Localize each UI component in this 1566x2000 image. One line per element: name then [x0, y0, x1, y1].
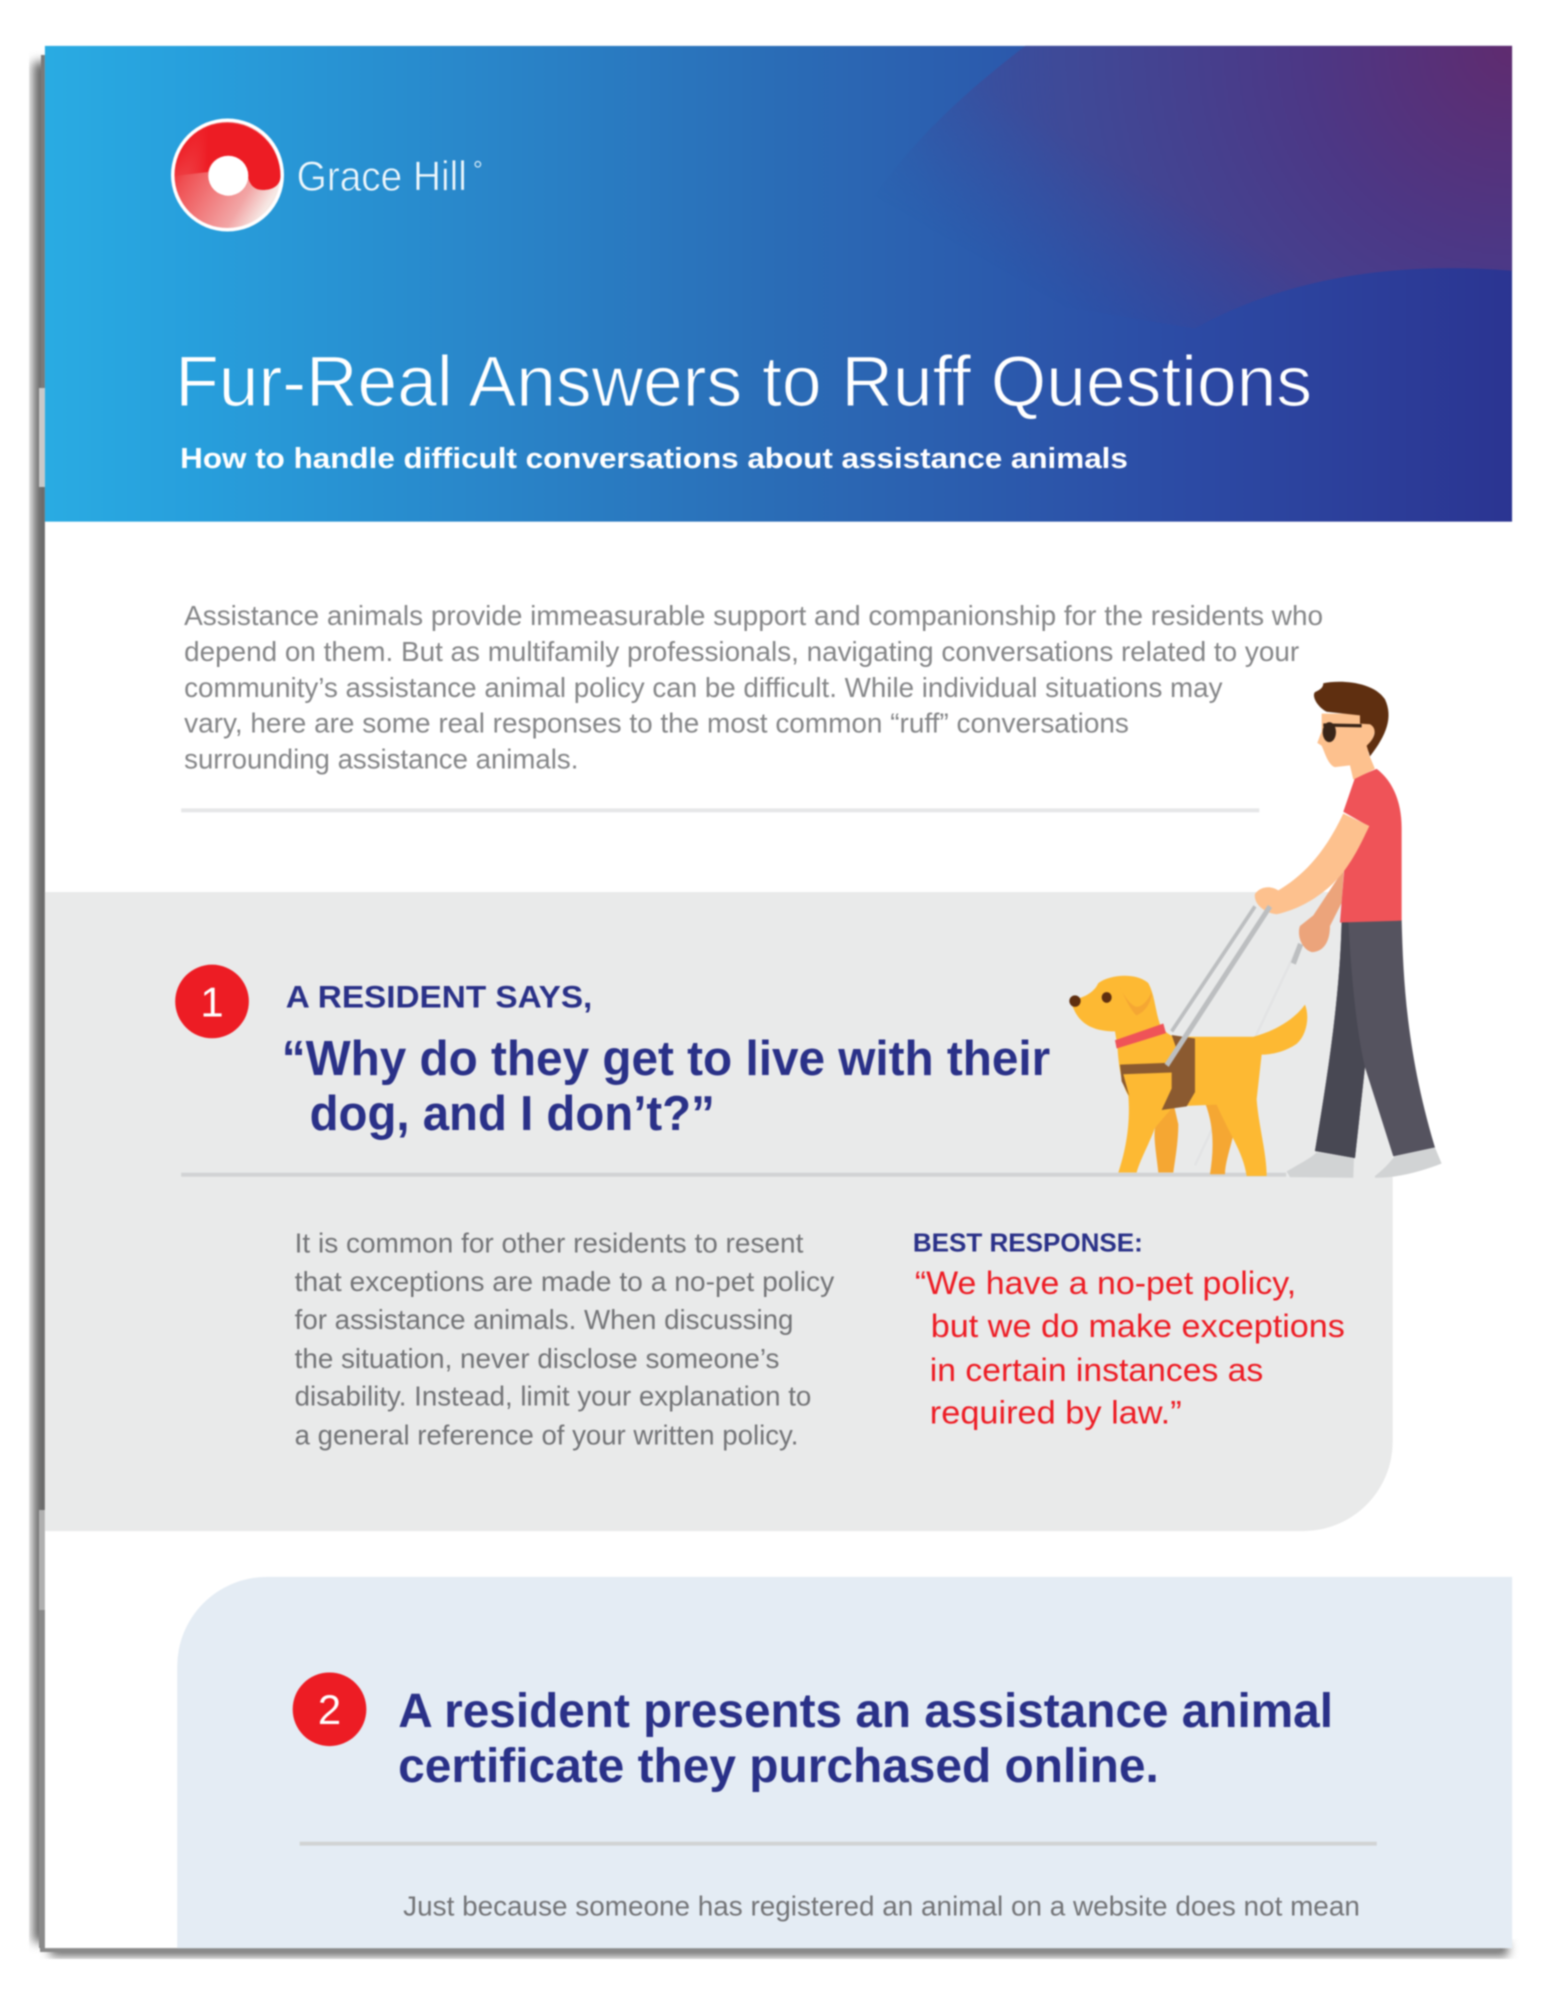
body text: the situation, never disclose someone’s — [295, 1343, 779, 1374]
dog eye — [1102, 992, 1112, 1003]
illustration: man with guide dog — [1069, 682, 1442, 1178]
body text: disability. Instead, limit your explanation to — [295, 1381, 811, 1412]
intro paragraph: vary, here are some real responses to the most common “ruff” conversations — [184, 708, 1129, 739]
dog ear — [1120, 987, 1152, 1015]
body text: a general reference of your written policy. — [295, 1419, 798, 1450]
panel: question 2 — [177, 1577, 1514, 1948]
intro paragraph: surrounding assistance animals. — [184, 744, 578, 775]
best response quote: in certain instances as — [930, 1351, 1263, 1388]
registered mark — [475, 161, 481, 167]
dog back legs — [1155, 1103, 1233, 1174]
number badge 2 — [293, 1672, 366, 1746]
title: Fur-Real Answers to Ruff Questions — [175, 342, 1312, 422]
intro paragraph: Assistance animals provide immeasurable support and companionship for the residents who — [184, 600, 1323, 631]
quote heading: dog, and I don’t?” — [310, 1087, 715, 1141]
label: a resident says: A RESIDENT SAYS, — [286, 978, 592, 1014]
dog — [1069, 976, 1307, 1176]
panel: question 1 — [45, 892, 1393, 1531]
dog body — [1070, 976, 1307, 1176]
number badge 1: 1 — [200, 978, 224, 1025]
front arm — [1255, 814, 1369, 914]
shirt — [1340, 769, 1402, 922]
head — [1317, 714, 1375, 780]
logo — [171, 118, 284, 231]
body text — [295, 1227, 834, 1450]
intro paragraph: depend on them. But as multifamily professionals, navigating conversations related to your — [184, 636, 1299, 667]
header banner — [45, 46, 1512, 522]
harness handle — [1167, 906, 1270, 1065]
best response quote: but we do make exceptions — [931, 1307, 1345, 1344]
best response label: BEST RESPONSE: — [913, 1229, 1143, 1257]
best response quote — [915, 1264, 1345, 1431]
dog nose — [1069, 995, 1081, 1007]
best response quote: required by law.” — [930, 1394, 1182, 1431]
number badge 2: 2 — [318, 1686, 341, 1733]
body text: for assistance animals. When discussing — [295, 1304, 793, 1335]
hair — [1314, 682, 1389, 756]
subtitle: How to handle difficult conversations about assistance animals — [180, 443, 1128, 475]
heading — [398, 1685, 1333, 1793]
body text: It is common for other residents to resent — [295, 1227, 804, 1258]
intro paragraph — [184, 600, 1323, 775]
heading: A resident presents an assistance animal — [398, 1685, 1333, 1738]
back arm — [1299, 869, 1344, 952]
best response quote: “We have a no-pet policy, — [915, 1264, 1296, 1301]
intro paragraph: community’s assistance animal policy can be difficult. While individual situations may — [184, 672, 1223, 703]
sunglasses — [1323, 722, 1362, 742]
dog harness — [1120, 1035, 1195, 1110]
dog collar — [1115, 1024, 1166, 1049]
quote heading — [282, 1032, 1050, 1141]
quote heading: “Why do they get to live with their — [282, 1032, 1050, 1086]
logo wordmark: Grace Hill — [297, 153, 467, 200]
cane — [1195, 944, 1301, 1165]
number badge 1 — [175, 965, 249, 1038]
shoes — [1287, 1147, 1442, 1178]
body text: Just because someone has registered an animal on a website does not mean — [403, 1890, 1360, 1921]
body text: that exceptions are made to a no-pet policy — [295, 1266, 834, 1297]
trousers — [1315, 920, 1435, 1158]
heading: certificate they purchased online. — [398, 1740, 1159, 1793]
